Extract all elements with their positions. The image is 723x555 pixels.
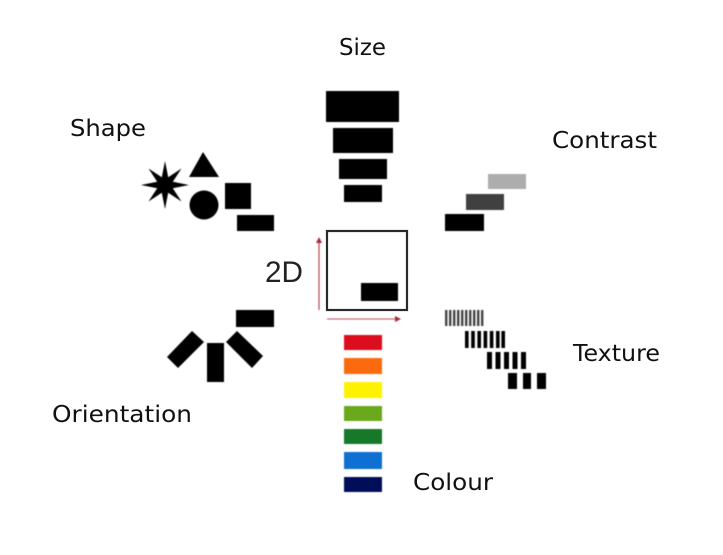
row: fine texture (445, 310, 483, 326)
row: medium texture (487, 352, 526, 369)
marker rectangle (361, 283, 398, 301)
heading: Shape: Shape (70, 116, 146, 142)
orientation bars (167, 310, 274, 382)
2D position panel (265, 231, 407, 322)
contrast bars (445, 174, 526, 231)
row: coarse texture (508, 373, 546, 389)
heading: Colour: Colour (413, 470, 494, 496)
row: medium-fine texture (465, 331, 505, 348)
heading: Size: Size (339, 35, 386, 61)
heading: Orientation: Orientation (52, 402, 192, 428)
heading: Texture: Texture (572, 341, 660, 367)
size bars (326, 91, 399, 202)
icon: star (141, 161, 189, 209)
icon: square (225, 183, 251, 209)
icon: circle (190, 190, 218, 220)
shape icons (141, 152, 274, 231)
arrow: vertical axis (316, 237, 322, 310)
plot box (327, 231, 407, 310)
axis label: 2D: 2D (265, 256, 303, 289)
heading: Contrast: Contrast (552, 128, 657, 154)
arrow: horizontal axis (327, 316, 401, 322)
icon: rectangle (237, 215, 274, 231)
icon: triangle (189, 152, 219, 177)
colour bars (344, 335, 382, 492)
texture bars (445, 310, 546, 389)
